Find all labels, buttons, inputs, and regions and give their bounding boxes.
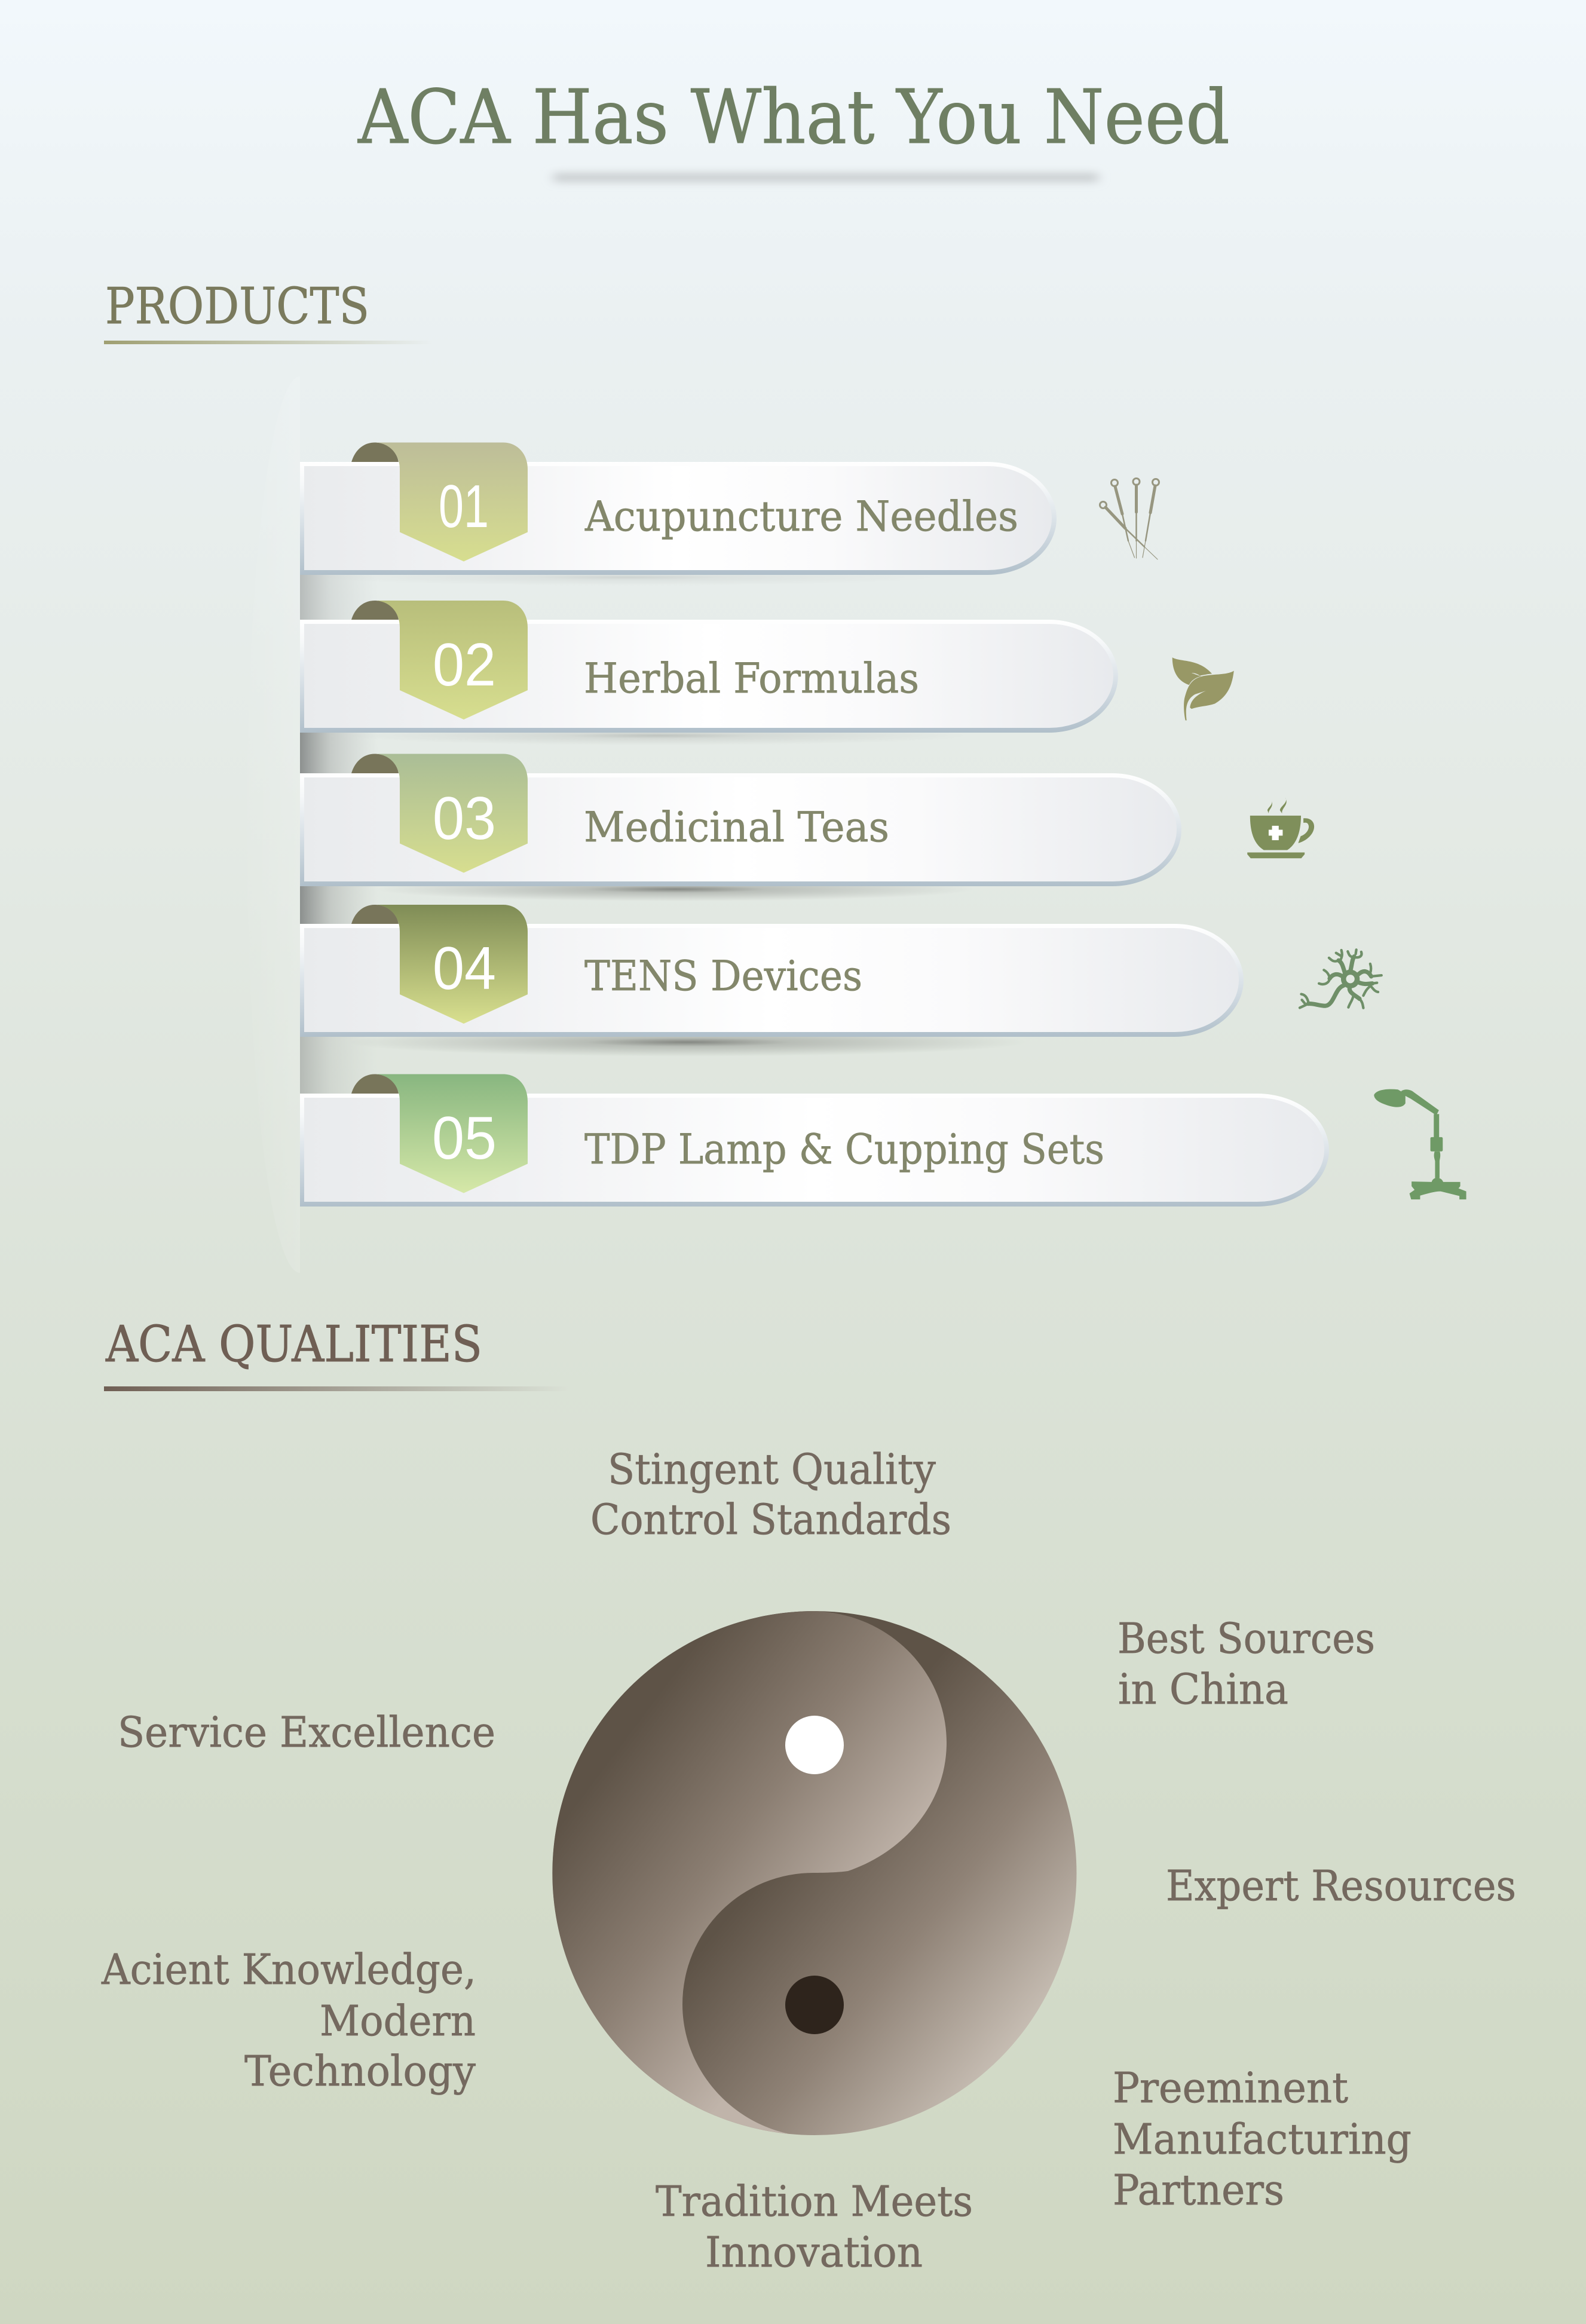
bar outer bbox=[300, 462, 1057, 575]
ribbon curl bbox=[351, 905, 399, 924]
ribbon curl bbox=[351, 601, 399, 620]
item 3: medicinal teas bbox=[300, 754, 1314, 886]
text: stringent quality bbox=[590, 1445, 951, 1544]
ribbon curl bbox=[351, 1074, 399, 1094]
icon: needles bbox=[1100, 478, 1159, 559]
ribbon bbox=[375, 905, 528, 1024]
ribbon curl bbox=[351, 754, 399, 773]
text: tradition meets innovation: Innovation bbox=[705, 2228, 923, 2277]
icon: neuron bbox=[1300, 950, 1382, 1008]
text: preeminent partners: Manufacturing bbox=[1113, 2115, 1412, 2164]
icon: leaves bbox=[1172, 657, 1234, 721]
gap shadings bbox=[300, 575, 378, 1094]
label: Medicinal Teas bbox=[584, 804, 889, 852]
bar inner bbox=[304, 1098, 1324, 1202]
text: ancient knowledge: Acient Knowledge, bbox=[101, 1945, 476, 1994]
number: 01 bbox=[439, 473, 489, 540]
ribbon bbox=[375, 601, 528, 719]
bar inner bbox=[304, 777, 1177, 881]
bar outer bbox=[300, 620, 1118, 733]
products underline bbox=[104, 341, 433, 344]
text: preeminent partners: Partners bbox=[1113, 2166, 1284, 2215]
text: stringent quality: Control Standards bbox=[590, 1495, 951, 1544]
bar inner bbox=[304, 624, 1113, 728]
item 1: acupuncture needles bbox=[300, 442, 1159, 575]
item 5: tdp lamp and cupping sets bbox=[300, 1074, 1466, 1207]
ribbon bbox=[375, 1074, 528, 1193]
heading: products: PRODUCTS bbox=[105, 277, 369, 335]
number: 04 bbox=[433, 935, 496, 1002]
text: service excellence: Service Excellence bbox=[118, 1708, 495, 1757]
title underline shadow bbox=[553, 173, 1099, 182]
number: 05 bbox=[432, 1105, 497, 1172]
ribbon curl bbox=[351, 442, 399, 463]
yin yang symbol bbox=[552, 1611, 1077, 2135]
title: ACA Has What You Need bbox=[357, 74, 1230, 161]
left lens highlight bbox=[247, 376, 300, 1273]
text: ancient knowledge: Modern bbox=[320, 1997, 476, 2046]
qualities underline bbox=[104, 1386, 569, 1391]
bar inner bbox=[304, 466, 1052, 570]
heading: aca qualities: ACA QUALITIES bbox=[105, 1315, 482, 1373]
text: best sources bbox=[1117, 1614, 1375, 1714]
bar outer bbox=[300, 1094, 1329, 1207]
item 4: tens devices bbox=[300, 905, 1382, 1037]
text: tradition meets innovation bbox=[656, 2177, 973, 2277]
text: preeminent partners: Preeminent bbox=[1113, 2063, 1348, 2112]
bar shadows bbox=[317, 569, 1028, 1057]
ribbon bbox=[375, 754, 528, 872]
item 2: herbal formulas bbox=[300, 601, 1234, 733]
text: tradition meets innovation: Tradition Meets bbox=[656, 2177, 973, 2226]
number: 03 bbox=[433, 785, 496, 852]
text: expert resources: Expert Resources bbox=[1166, 1861, 1516, 1910]
panel: qualities bbox=[101, 1445, 1516, 2277]
bar outer bbox=[300, 924, 1244, 1037]
bar inner bbox=[304, 928, 1239, 1032]
text: best sources: Best Sources bbox=[1117, 1614, 1375, 1663]
panel: products bbox=[247, 376, 1466, 1273]
text: ancient knowledge: Technology bbox=[244, 2047, 476, 2096]
label: TDP Lamp & Cupping Sets bbox=[584, 1126, 1104, 1174]
icon: tea cup bbox=[1247, 798, 1314, 858]
text: stringent quality: Stingent Quality bbox=[608, 1445, 936, 1494]
label: Herbal Formulas bbox=[584, 655, 919, 703]
label: TENS Devices bbox=[584, 953, 862, 1000]
ribbon bbox=[375, 442, 528, 562]
bar outer bbox=[300, 773, 1181, 886]
icon: lamp bbox=[1374, 1089, 1466, 1199]
text: best sources: in China bbox=[1118, 1665, 1288, 1714]
number: 02 bbox=[433, 632, 496, 699]
text: ancient knowledge bbox=[101, 1945, 476, 2096]
text: preeminent partners bbox=[1113, 2063, 1412, 2215]
label: Acupuncture Needles bbox=[584, 493, 1018, 541]
